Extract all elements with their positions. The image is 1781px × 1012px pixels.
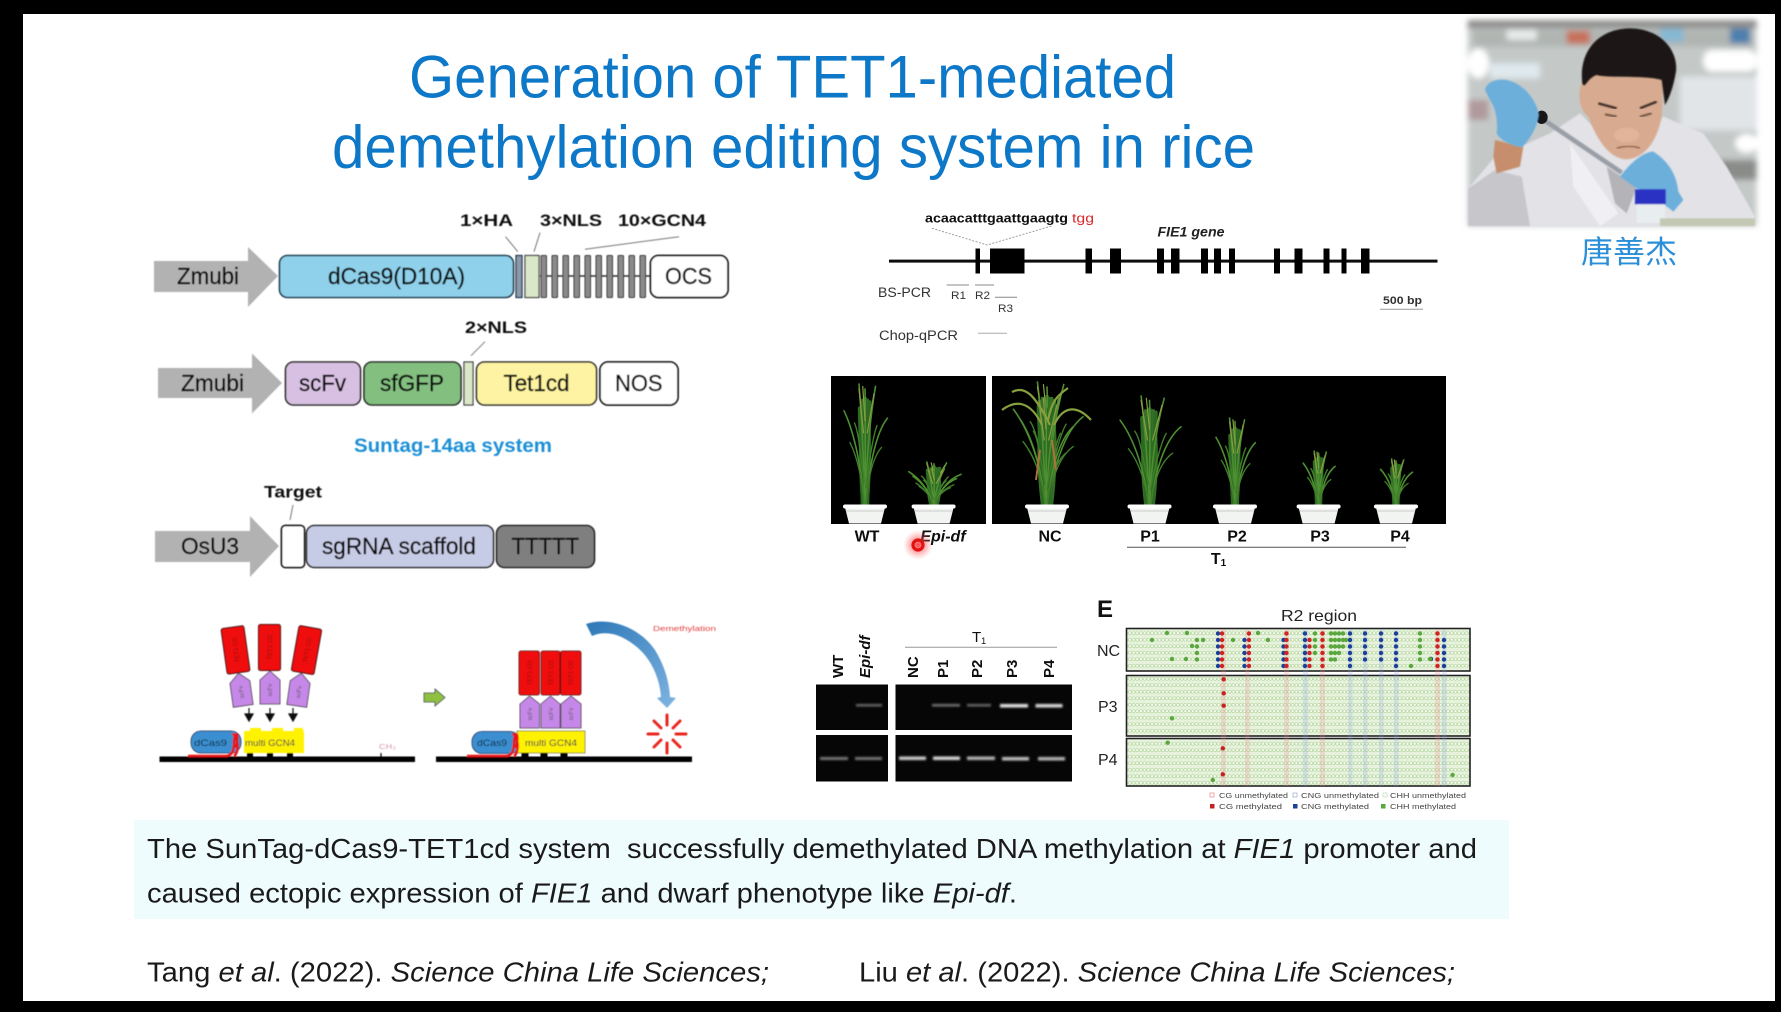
legend: CG methylated [1219, 802, 1282, 811]
callout: conclusion [134, 820, 1509, 919]
red effectors and purple tags: TET1 CD [569, 660, 575, 686]
gel labels: Epi-df [857, 634, 874, 678]
tags: 10×GCN4 repeats [540, 256, 650, 298]
arrow: blue curve [586, 622, 676, 708]
dna strand [160, 756, 415, 762]
plant labels: Epi-df [920, 528, 967, 546]
box: OCS [650, 256, 728, 298]
gel labels: T [972, 629, 981, 646]
legend: CHH methylated [1390, 802, 1456, 811]
panel: methylation chart E [1097, 596, 1470, 811]
Chop-qPCR [879, 328, 1007, 343]
dCas9 capsule [191, 731, 241, 753]
P3 methylated sites [1170, 677, 1226, 720]
label: Target: Target [264, 482, 322, 502]
left state: unbound: scFv [268, 684, 274, 696]
target sequence: tgg [1072, 210, 1094, 226]
scale bar: 500 bp [1383, 295, 1422, 307]
gel labels: P2 [969, 660, 986, 678]
hair [1582, 28, 1676, 105]
panel letter: E [1097, 596, 1113, 623]
title: Generation of TET1-mediated [409, 44, 1176, 110]
box: OCS: OCS [665, 263, 712, 289]
box: NOS [600, 362, 678, 405]
gel labels: 1 [981, 636, 986, 646]
tag: 1×HA [516, 256, 522, 298]
pots [843, 504, 1418, 524]
right state: bound: scFv [569, 708, 575, 720]
right state: bound [436, 622, 716, 762]
NC methylated sites [1197, 634, 1444, 668]
plant labels: NC [1038, 528, 1062, 546]
gel top row [816, 684, 1072, 730]
box: Tet1cd: Tet1cd [504, 370, 570, 396]
sgRNA hairpin [467, 734, 518, 756]
gel bottom row [816, 735, 1072, 782]
P4 methylated sites [1166, 740, 1455, 782]
red effectors and purple tags [519, 651, 581, 695]
dCas9 capsule [472, 732, 520, 754]
legend: CG unmethylated [1219, 791, 1288, 800]
label: Target [264, 482, 322, 520]
legend: CHH unmethylated [1390, 791, 1466, 800]
face [1579, 70, 1663, 159]
arrow: Zmubi promoter [154, 247, 278, 307]
legend: CNG unmethylated [1301, 791, 1379, 800]
red effectors and purple tags: TET1 CD [528, 660, 534, 686]
presenter name: 唐善杰 [1581, 235, 1677, 270]
box: Tet1cd [476, 362, 596, 405]
cursor marker [903, 530, 933, 560]
references [147, 956, 1455, 988]
references: Liu et al. (2022). Science China Life Sciences; [859, 956, 1455, 988]
photo backgrounds [831, 376, 1446, 524]
target sequence: acaacatttgaattgaagtg [925, 210, 1068, 226]
labels: tags: 10×GCN4 [618, 211, 707, 230]
construct 3: sgRNA [155, 482, 594, 577]
exons [976, 248, 1370, 274]
gene line [889, 260, 1438, 263]
labels: tags [460, 211, 707, 252]
box: dCas9 [280, 256, 514, 298]
construct 2: scFv-Tet1cd [158, 318, 678, 414]
methyl mark [379, 742, 396, 757]
plant labels: WT [855, 528, 880, 546]
arrow: OsU3 promoter: OsU3 [181, 533, 239, 559]
legend: CNG methylated [1301, 802, 1369, 811]
panel: gel [816, 629, 1072, 782]
box: target [282, 526, 304, 568]
box: TTTTT: TTTTT [512, 533, 579, 559]
panel: mechanism schematic [160, 622, 716, 762]
left glove [1485, 80, 1539, 147]
Chop-qPCR: Chop-qPCR [879, 328, 958, 343]
panel: construct diagrams [154, 211, 728, 577]
box: sgRNA scaffold [306, 526, 494, 568]
panel: FIE1 gene map [878, 210, 1438, 343]
box: scFv: scFv [299, 370, 346, 396]
arrow: green transition [424, 689, 445, 706]
construct 1: SunTag dCas9 [154, 211, 728, 307]
labels: tags: 3×NLS [540, 211, 602, 230]
pipette [1540, 117, 1622, 173]
chart title: R2 region [1281, 608, 1357, 625]
arrows down [245, 708, 297, 721]
arrow: Zmubi promoter: Zmubi [181, 370, 244, 396]
BS-PCR regions: R2 [975, 290, 990, 302]
column stripes [1221, 629, 1446, 786]
right glove [1620, 152, 1683, 212]
right state: bound: scFv [549, 708, 555, 720]
plant labels: 1 [1221, 558, 1227, 569]
labels: tags: 1×HA [460, 211, 513, 230]
left state: unbound: scFv [296, 685, 304, 699]
BS-PCR regions [878, 285, 1017, 315]
red effectors and purple tags: TET1 CD [549, 660, 555, 686]
label: FIE1 gene: FIE1 gene [1158, 224, 1225, 240]
arrow: Zmubi promoter: Zmubi [177, 263, 239, 289]
box: scFv [286, 362, 360, 405]
box: sfGFP: sfGFP [380, 370, 444, 396]
panel: plant phenotypes [831, 376, 1446, 569]
target sequence [925, 210, 1094, 245]
blue bottle [1635, 189, 1666, 223]
plant labels: P2 [1227, 528, 1247, 546]
left state: unbound: TET1 CD [268, 634, 274, 660]
title: demethylation editing system in rice [332, 114, 1255, 180]
row labels [1097, 643, 1120, 769]
dCas9 capsule: dCas9 [194, 738, 227, 748]
plant labels: P1 [1140, 528, 1160, 546]
dCas9 capsule: dCas9 [477, 738, 507, 748]
box: NOS: NOS [615, 370, 662, 396]
sgRNA hairpin [188, 734, 238, 756]
icon: red burst [648, 715, 686, 753]
red effectors and purple tags [221, 626, 250, 674]
box: TTTTT [496, 526, 594, 568]
gel labels: WT [830, 655, 847, 678]
BS-PCR regions: BS-PCR [878, 285, 931, 300]
box: sfGFP [364, 362, 461, 405]
left state: unbound: scFv [238, 685, 246, 699]
plant labels [855, 528, 1410, 569]
dna strand [436, 756, 692, 762]
legend [1210, 791, 1466, 811]
gel labels: P3 [1004, 660, 1021, 678]
red effectors and purple tags: TET1 CD [232, 636, 242, 663]
plant labels: P3 [1310, 528, 1330, 546]
plant labels: T [1211, 551, 1221, 568]
presenter photo [1468, 20, 1758, 226]
gel labels: P1 [935, 660, 952, 678]
box: dCas9: dCas9(D10A) [328, 263, 465, 289]
forearm [1493, 140, 1523, 173]
yellow multi GCN4: multi GCN4 [245, 738, 295, 748]
arrow: OsU3 promoter [155, 516, 279, 577]
plants [844, 382, 1412, 506]
arrow: Zmubi promoter [158, 354, 282, 414]
box: sgRNA scaffold: sgRNA scaffold [322, 533, 476, 559]
lab coat [1468, 113, 1755, 226]
references: Tang et al. (2022). Science China Life Sciences; [147, 956, 769, 988]
BS-PCR regions: R1 [951, 290, 966, 302]
plant labels: P4 [1390, 528, 1410, 546]
callout: conclusion: caused ectopic expression of FIE1 and dwarf phenotype like Epi-df. [147, 878, 1017, 908]
tag: 3×NLS [525, 256, 539, 298]
callout: conclusion: The SunTag-dCas9-TET1cd system successfully demethylated DNA methylation at FIE1 promoter and [147, 833, 1477, 864]
right state: bound: scFv [528, 708, 534, 720]
gel labels: NC [905, 656, 922, 678]
BS-PCR regions: R3 [998, 303, 1013, 315]
row labels: P4 [1098, 752, 1118, 769]
yellow multi GCN4: multi GCN4 [525, 738, 577, 748]
row labels: NC [1097, 643, 1120, 660]
label: 2×NLS: 2×NLS [465, 318, 527, 337]
gel labels [830, 629, 1058, 678]
yellow multi GCN4 [244, 728, 304, 757]
row labels: P3 [1098, 699, 1118, 716]
left state: unbound: TET1 CD [303, 637, 313, 663]
caption: Suntag-14aa system: Suntag-14aa system [354, 436, 552, 457]
lollipop panels [1126, 628, 1470, 786]
label: 2×NLS [465, 318, 527, 356]
tag: 2×NLS [464, 362, 473, 405]
gel labels: P4 [1041, 659, 1058, 678]
label: Demethylation: Demethylation [653, 624, 716, 633]
title [332, 44, 1255, 180]
yellow multi GCN4 [517, 731, 585, 756]
left state: unbound [160, 624, 415, 762]
scale bar [1380, 295, 1423, 309]
methyl mark: CH₃ [379, 742, 396, 751]
